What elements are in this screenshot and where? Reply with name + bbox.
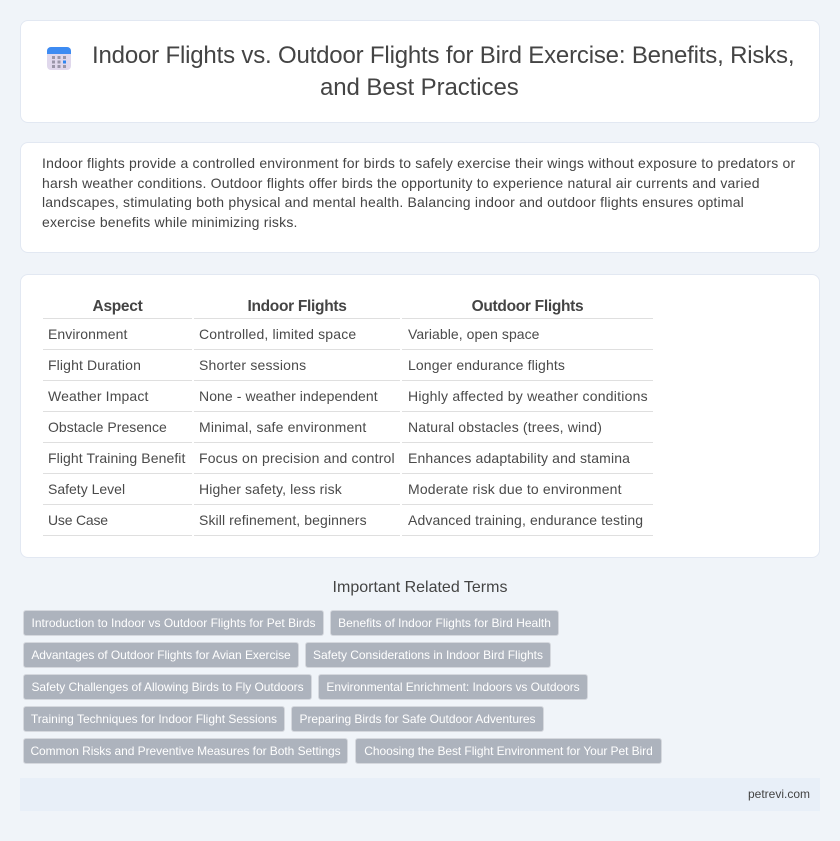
text block: introduction: [42, 155, 795, 230]
row: flight duration: Longer endurance flights: [408, 357, 565, 373]
text block: introduction: Indoor flights provide a controlled environment for birds to safely exercise their wings without exposure to predators or: [42, 155, 795, 171]
panel: comparison table: [20, 274, 820, 558]
tag: Training Techniques for Indoor Flight Sessions: [31, 712, 277, 726]
tag: [23, 706, 285, 732]
row: safety level: Safety Level: [48, 481, 125, 497]
table header: Aspect: [93, 298, 142, 315]
row: obstacle presence: Obstacle Presence: [48, 419, 167, 435]
row: safety level: [48, 481, 622, 497]
text block: introduction: harsh weather conditions. Outdoor flights offer birds the opportunity to experience natural air currents and varied: [42, 175, 760, 191]
tag: Environmental Enrichment: Indoors vs Outdoors: [326, 680, 580, 694]
row: flight duration: Flight Duration: [48, 357, 141, 373]
footer: [20, 778, 820, 811]
row: flight training benefit: Flight Training Benefit: [48, 450, 185, 466]
row: obstacle presence: [48, 419, 602, 435]
tag: [23, 738, 348, 764]
tag: Choosing the Best Flight Environment for Your Pet Bird: [364, 744, 653, 758]
row: weather impact: [48, 388, 648, 404]
row: obstacle presence: Natural obstacles (trees, wind): [408, 419, 602, 435]
tag: [330, 610, 559, 636]
row: obstacle presence: Minimal, safe environment: [199, 419, 366, 435]
table header: [92, 298, 583, 315]
footer source label: petrevi.com: [748, 787, 810, 801]
row: safety level: Higher safety, less risk: [199, 481, 342, 497]
tag: [23, 610, 324, 636]
row: use case: [48, 512, 643, 528]
tag: Preparing Birds for Safe Outdoor Adventures: [300, 712, 535, 726]
tag: Safety Challenges of Allowing Birds to Fly Outdoors: [31, 680, 304, 694]
tag: Introduction to Indoor vs Outdoor Flights for Pet Birds: [31, 616, 316, 630]
text block: introduction: exercise benefits while minimizing risks.: [42, 214, 298, 230]
tag: [23, 674, 312, 700]
tag: [305, 642, 551, 668]
row: environment: Variable, open space: [408, 326, 540, 342]
tag: Safety Considerations in Indoor Bird Flights: [313, 648, 543, 662]
table: comparison: [43, 298, 653, 536]
tag: [291, 706, 544, 732]
row: weather impact: None - weather independent: [199, 388, 378, 404]
panel: introduction: [20, 142, 820, 253]
row: weather impact: Highly affected by weather conditions: [408, 388, 648, 404]
tag: Common Risks and Preventive Measures for Both Settings: [30, 744, 341, 758]
row: use case: Skill refinement, beginners: [199, 512, 367, 528]
row: use case: Use Case: [48, 512, 108, 528]
table header: Indoor Flights: [247, 298, 347, 315]
text block: introduction: landscapes, stimulating both physical and mental health. Balancing indoor and outdoor flights ensures optimal: [42, 194, 744, 210]
row: flight duration: Shorter sessions: [199, 357, 306, 373]
row: flight duration: [48, 357, 565, 373]
title: Indoor Flights vs. Outdoor Flights for Bird Exercise: Benefits, Risks,: [92, 42, 794, 69]
title: and Best Practices: [320, 74, 519, 101]
panel: related term tags: [23, 610, 662, 764]
heading: related terms: Important Related Terms: [333, 579, 507, 596]
tag: Advantages of Outdoor Flights for Avian Exercise: [31, 648, 291, 662]
tag: [23, 642, 299, 668]
row: environment: Controlled, limited space: [199, 326, 356, 342]
tag: Benefits of Indoor Flights for Bird Health: [338, 616, 551, 630]
row: flight training benefit: Enhances adaptability and stamina: [408, 450, 630, 466]
table header: Outdoor Flights: [472, 298, 583, 315]
row: flight training benefit: Focus on precision and control: [199, 450, 395, 466]
tag: [318, 674, 588, 700]
row: environment: [48, 326, 540, 342]
row: flight training benefit: [48, 450, 630, 466]
row: safety level: Moderate risk due to environment: [408, 481, 622, 497]
row: environment: Environment: [48, 326, 127, 342]
row: weather impact: Weather Impact: [48, 388, 149, 404]
title: [92, 42, 794, 101]
tag: [355, 738, 662, 764]
row: use case: Advanced training, endurance testing: [408, 512, 643, 528]
panel: header: [20, 20, 820, 123]
icon: calendar: [47, 47, 71, 70]
